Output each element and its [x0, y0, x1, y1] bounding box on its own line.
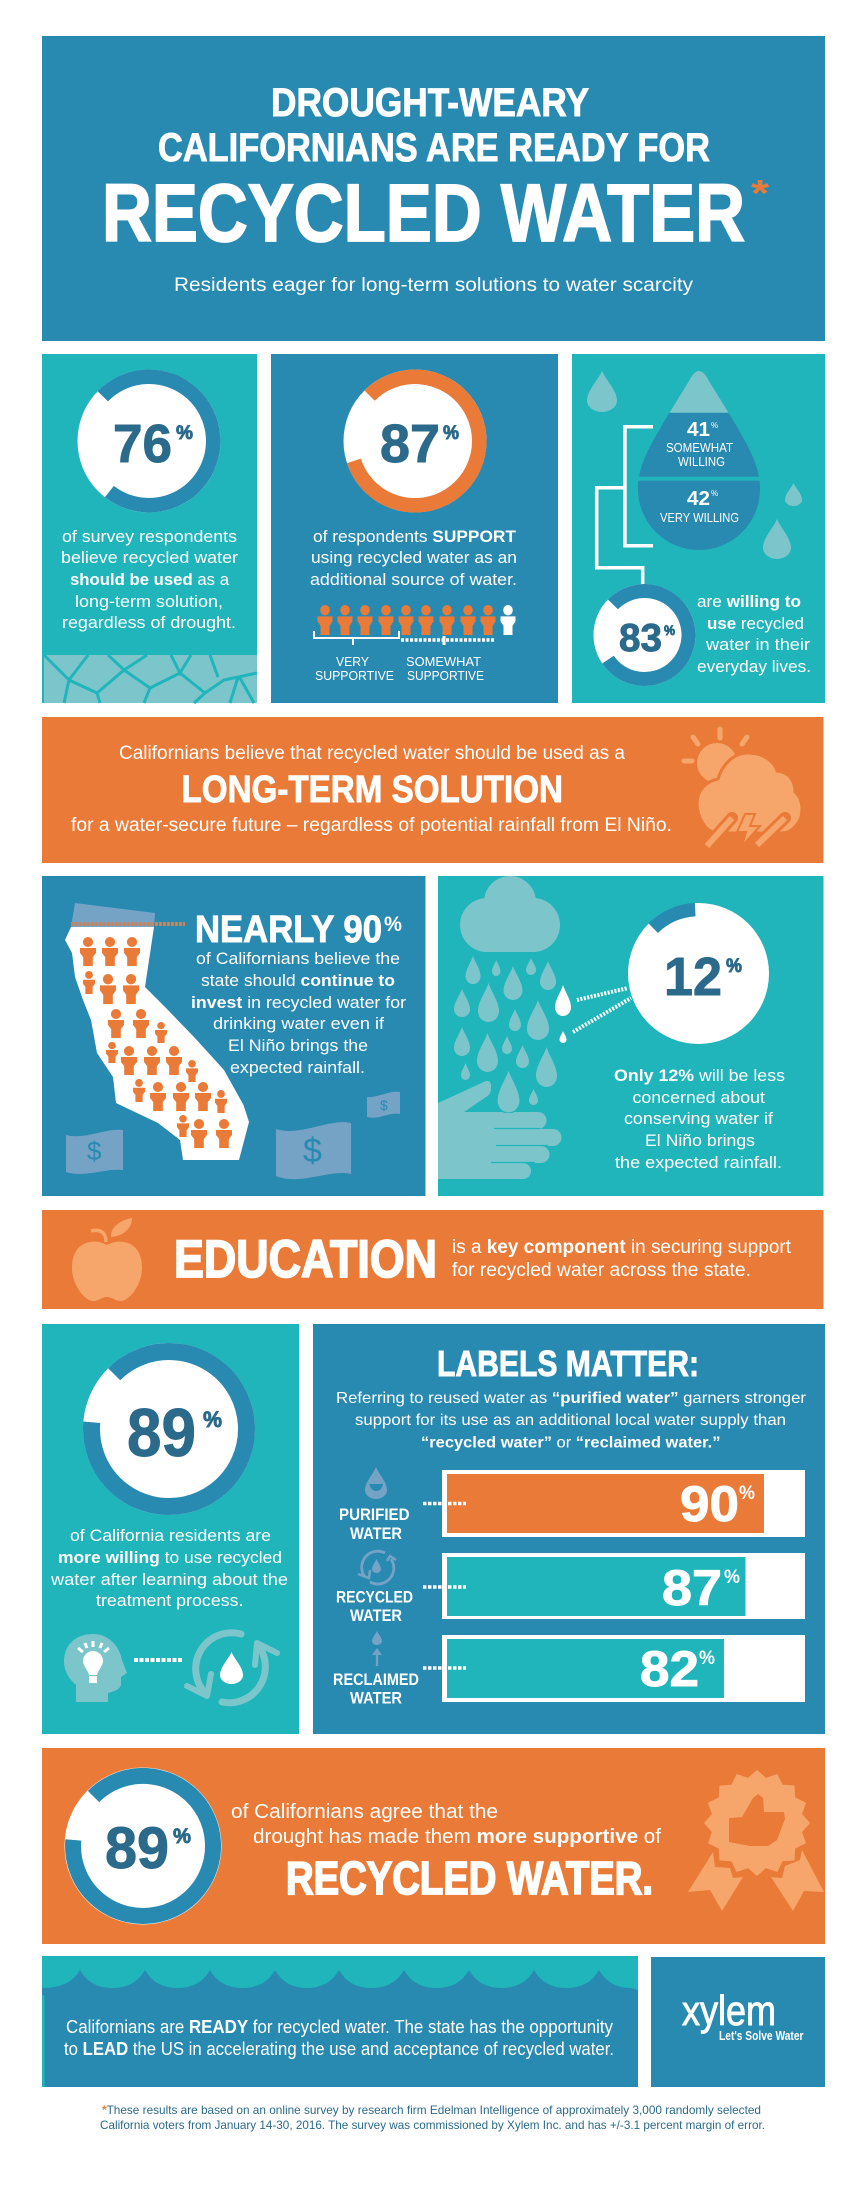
panel: 76 percent [42, 354, 257, 703]
bar: recycled water 87 [442, 1553, 805, 1619]
donut chart 76: 76 [113, 414, 172, 474]
text block: for recycled water across the state. [452, 1260, 751, 1281]
text block: “recycled water” or “reclaimed water.” [421, 1434, 720, 1452]
title line 1: DROUGHT-WEARY [271, 81, 589, 125]
donut chart 89: 89 [105, 1816, 169, 1881]
donut chart 87 [344, 370, 486, 512]
title line 3: RECYCLED WATER [102, 168, 745, 259]
text block: believe recycled water [61, 548, 238, 567]
large segmented drop: 42 [687, 488, 710, 510]
text block: drought has made them more supportive of [253, 1826, 661, 1848]
text block: invest in recycled water for [191, 993, 406, 1012]
bar: purified water 90: % [739, 1483, 755, 1504]
text block: Californians are READY for recycled water. The state has the opportunity [66, 2017, 613, 2037]
banner: education [42, 1210, 824, 1309]
large segmented drop: WILLING [678, 454, 725, 469]
icon: recycled arrows [358, 1551, 396, 1584]
connector lines [597, 427, 653, 586]
donut chart 83 [594, 584, 696, 686]
bracket labels: SUPPORTIVE [407, 668, 484, 683]
text block: water in their [705, 635, 810, 654]
panel: 89 percent more willing [42, 1324, 299, 1734]
bracket labels: SUPPORTIVE [315, 668, 394, 683]
bar labels: PURIFIED [339, 1505, 410, 1524]
donut chart 83: % [664, 622, 675, 638]
large segmented drop: % [711, 489, 718, 498]
text block: El Niño brings the [228, 1036, 368, 1055]
donut chart 89: % [203, 1407, 222, 1432]
text block: expected rainfall. [230, 1058, 365, 1077]
bar: recycled water 87: % [724, 1567, 740, 1588]
panel: 12 percent [438, 876, 824, 1196]
brackets [314, 631, 495, 645]
bar: recycled water 87: 87 [662, 1560, 722, 1616]
text block: treatment process. [96, 1591, 244, 1610]
text block: additional source of water. [310, 570, 517, 589]
large segmented drop: SOMEWHAT [666, 440, 733, 455]
text block [697, 592, 811, 676]
text block: should be used as a [70, 570, 230, 589]
icon: money bills [66, 1092, 400, 1179]
heading: RECYCLED WATER. [286, 1852, 653, 1904]
text block: everyday lives. [697, 657, 811, 676]
california map with people [65, 903, 249, 1160]
heading: % [384, 913, 402, 936]
panel: xylem logo: Let's Solve Water [719, 2028, 804, 2043]
bar: purified water 90: 90 [680, 1476, 739, 1532]
bar: reclaimed water 82: % [699, 1648, 715, 1669]
heading: NEARLY 90 [195, 909, 382, 951]
donut chart 12: 12 [664, 947, 722, 1007]
text block: El Niño brings [645, 1131, 755, 1150]
donut chart 83: 83 [619, 617, 662, 660]
text block: support for its use as an additional local water supply than [355, 1412, 786, 1429]
banner: more supportive [42, 1748, 825, 1944]
donut chart 89 [83, 1343, 255, 1515]
text block [50, 1526, 288, 1610]
white drops [555, 985, 571, 1043]
banner: long-term solution: Californians believe that recycled water should be used as a [119, 743, 625, 764]
text block: are willing to [697, 592, 801, 611]
text block: regardless of drought. [62, 613, 236, 632]
bracket labels [315, 654, 484, 683]
panel: nearly 90 percent [42, 876, 426, 1196]
donut chart 76: % [176, 423, 193, 444]
icon: award rosette with thumbs up [688, 1770, 824, 1911]
bar labels: WATER [350, 1524, 402, 1543]
text block [310, 527, 517, 589]
text block: of survey respondents [62, 527, 237, 546]
bracket labels: SOMEWHAT [406, 654, 481, 669]
donut chart 89 [64, 1768, 222, 1924]
text block: water after learning about the [50, 1570, 288, 1589]
text block [191, 949, 406, 1077]
panel: labels matter [313, 1324, 825, 1734]
text block: Only 12% will be less [614, 1066, 785, 1085]
donut chart 87: % [443, 423, 459, 444]
large segmented drop: VERY WILLING [660, 510, 739, 525]
donut chart 87: 87 [380, 414, 440, 474]
dotted leader lines [423, 1504, 466, 1668]
icon: reclaimed drop and arrow [372, 1631, 382, 1666]
dotted lines [573, 988, 631, 1032]
dotted line [134, 1658, 183, 1662]
text block [452, 1237, 792, 1281]
text block: of Californians agree that the [231, 1801, 498, 1823]
title line 2: CALIFORNIANS ARE READY FOR [158, 126, 710, 170]
small water drops [587, 371, 802, 559]
text block: the expected rainfall. [615, 1153, 782, 1172]
text block: more willing to use recycled [58, 1548, 282, 1567]
large segmented drop: 41 [687, 419, 710, 441]
footnote [100, 2103, 765, 2132]
banner heading: LONG-TERM SOLUTION [182, 769, 563, 811]
panel: call to action with waves [42, 1956, 638, 2087]
bar: purified water 90 [442, 1470, 805, 1537]
bar: reclaimed water 82 [442, 1635, 805, 1702]
panel: 83 percent willing [572, 354, 825, 703]
bracket labels: VERY [336, 654, 369, 669]
text block [61, 527, 238, 632]
text block: state should continue to [201, 971, 395, 990]
text block: long-term solution, [75, 592, 223, 611]
text block: is a key component in securing support [452, 1237, 792, 1258]
text block [231, 1801, 661, 1848]
footnote: *These results are based on an online survey by research firm Edelman Intelligence of approximately 3,000 randomly selected [102, 2103, 761, 2117]
text block: of Californians believe the [196, 949, 400, 968]
icon: purified drop [365, 1467, 387, 1499]
icon: money bills: $ [87, 1136, 102, 1166]
people pictogram [318, 605, 516, 635]
text block: concerned about [632, 1088, 765, 1107]
text block: to LEAD the US in accelerating the use and acceptance of recycled water. [64, 2039, 614, 2059]
text block [614, 1066, 785, 1172]
donut chart 89: % [173, 1825, 191, 1848]
icon: rain cloud [454, 876, 560, 1113]
bar labels: WATER [350, 1606, 402, 1625]
text block: conserving water if [624, 1109, 773, 1128]
panel: xylem logo: xylem [682, 1987, 776, 2034]
icon: head with light bulb [64, 1634, 127, 1702]
bar labels: RECLAIMED [333, 1670, 419, 1689]
cracked ground pattern [44, 655, 257, 703]
large segmented drop: % [711, 421, 718, 430]
donut chart 12: % [726, 956, 742, 977]
waves [42, 1970, 638, 2087]
text block [336, 1390, 807, 1452]
panel: 87 percent [271, 354, 558, 703]
orange asterisk: * [751, 173, 769, 215]
heading: LABELS MATTER: [437, 1343, 699, 1384]
icon: sun, cloud and rain [684, 729, 802, 846]
text block: of California residents are [70, 1526, 271, 1545]
icon: water recycle [187, 1633, 277, 1703]
heading: EDUCATION [174, 1230, 437, 1289]
donut chart 76 [78, 370, 220, 512]
text block: of respondents SUPPORT [313, 527, 517, 546]
header panel [42, 36, 825, 341]
icon: money bills: $ [303, 1132, 322, 1170]
text block: use recycled [707, 614, 804, 633]
donut chart 89: 89 [127, 1395, 196, 1471]
panel: xylem logo [651, 1957, 825, 2087]
bar: reclaimed water 82: 82 [640, 1641, 699, 1697]
text block [64, 2017, 614, 2059]
bar labels: WATER [350, 1688, 402, 1708]
icon: hand [438, 1081, 562, 1179]
icon: apple [72, 1218, 142, 1301]
large segmented drop [634, 371, 764, 550]
banner: long-term solution: for a water-secure future – regardless of potential rainfall from El Niño. [71, 815, 672, 836]
text block: drinking water even if [213, 1014, 384, 1033]
text block: using recycled water as an [311, 548, 517, 567]
bar labels [333, 1505, 419, 1708]
text block: Referring to reused water as “purified water” garners stronger [336, 1390, 807, 1407]
bar labels: RECYCLED [336, 1588, 413, 1606]
donut chart 12 [628, 903, 769, 1044]
banner: long-term solution [42, 717, 824, 863]
icon: money bills: $ [380, 1097, 388, 1113]
footnote: California voters from January 14-30, 2016. The survey was commissioned by Xylem Inc. and has +/-3.1 percent margin of error. [100, 2118, 765, 2132]
subtitle: Residents eager for long-term solutions to water scarcity [174, 274, 693, 296]
